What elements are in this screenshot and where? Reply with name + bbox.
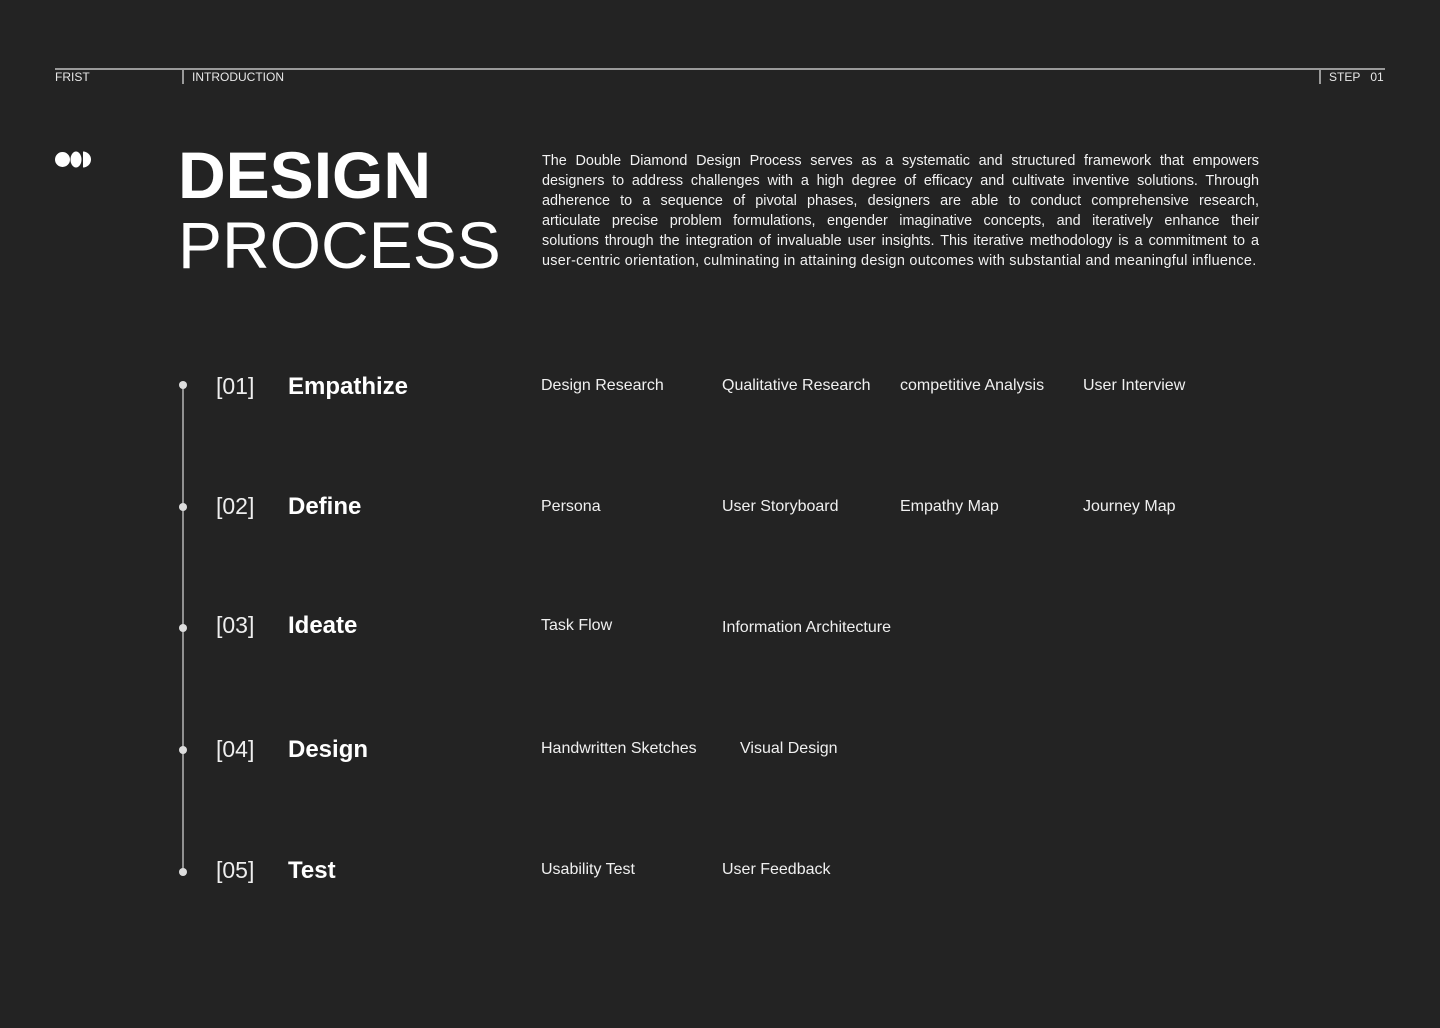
- row 04: [216, 736, 838, 763]
- header: STEP 01: STEP 01: [1329, 70, 1384, 84]
- row 03: Task Flow: [541, 617, 612, 634]
- row 02: [02]: [216, 493, 254, 519]
- row 01: [01]: [216, 373, 254, 399]
- row 04: Handwritten Sketches: [541, 740, 697, 757]
- row 01: [216, 373, 1186, 400]
- row 04: Design: [288, 736, 368, 763]
- description paragraph: The Double Diamond Design Process serves as a systematic and structured framework that empowers: [542, 153, 1259, 169]
- description paragraph: [542, 153, 1259, 269]
- row 02: [216, 493, 1176, 520]
- row 05: Test: [288, 857, 336, 884]
- row 05: [05]: [216, 857, 254, 883]
- title: DESIGN: [178, 138, 431, 212]
- header rule: [55, 68, 1385, 70]
- header: FRIST: FRIST: [55, 70, 90, 84]
- row 02: Empathy Map: [900, 498, 999, 515]
- icon: logo: [55, 152, 91, 168]
- row 02: User Storyboard: [722, 498, 838, 515]
- row 05: User Feedback: [722, 861, 830, 878]
- row 05: [216, 857, 830, 884]
- description paragraph: designers to address challenges with a high degree of efficacy and cultivate inventive solutions. Through: [542, 173, 1259, 189]
- row 01: User Interview: [1083, 377, 1185, 394]
- row 03: [216, 612, 891, 639]
- description paragraph: adherence to a sequence of pivotal phases, designers are able to conduct comprehensive research,: [542, 193, 1259, 209]
- description paragraph: solutions through the integration of invaluable user insights. This iterative methodology is a commitment to a: [542, 233, 1259, 249]
- row 04: Visual Design: [740, 740, 838, 757]
- description paragraph: user-centric orientation, culminating in attaining design outcomes with substantial and meaningful influence.: [542, 253, 1256, 269]
- row 01: Empathize: [288, 373, 408, 400]
- row 03: Ideate: [288, 612, 357, 639]
- title: [178, 138, 501, 282]
- row 05: Usability Test: [541, 861, 635, 878]
- row 01: Qualitative Research: [722, 377, 871, 394]
- timeline: [179, 381, 187, 876]
- title: PROCESS: [178, 208, 501, 282]
- row 03: Information Architecture: [722, 619, 891, 636]
- description paragraph: articulate precise problem formulations, engender imaginative concepts, and iteratively enhance their: [542, 213, 1259, 229]
- row 02: Journey Map: [1083, 498, 1176, 515]
- header: INTRODUCTION: INTRODUCTION: [192, 70, 284, 84]
- row 02: Define: [288, 493, 361, 520]
- row 02: Persona: [541, 498, 601, 515]
- row 01: competitive Analysis: [900, 377, 1044, 394]
- row 01: Design Research: [541, 377, 664, 394]
- row 03: [03]: [216, 612, 254, 638]
- row 04: [04]: [216, 736, 254, 762]
